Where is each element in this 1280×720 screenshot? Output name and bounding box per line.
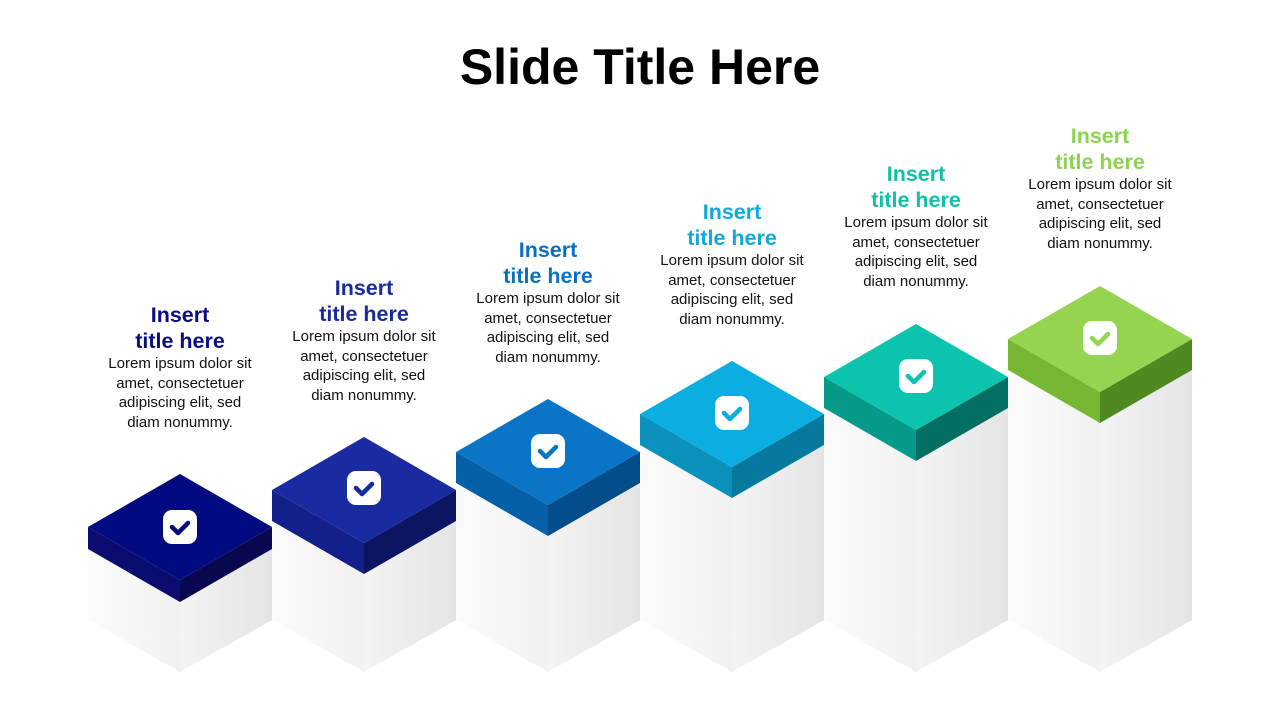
text 1: diam nonummy. bbox=[127, 414, 233, 430]
text 1: Lorem ipsum dolor sit bbox=[108, 355, 252, 372]
text 4: Lorem ipsum dolor sit bbox=[660, 252, 804, 269]
text 5: diam nonummy. bbox=[863, 272, 969, 290]
text 5: Insert bbox=[887, 162, 945, 186]
text 3: Lorem ipsum dolor sit bbox=[476, 290, 620, 307]
text 6: adipiscing elit, sed bbox=[1039, 215, 1161, 232]
block 4 bbox=[640, 361, 824, 672]
text 6 bbox=[1028, 124, 1172, 252]
text 1: title here bbox=[135, 329, 225, 353]
text 3: adipiscing elit, sed bbox=[487, 329, 609, 346]
text 3: Insert bbox=[519, 238, 577, 262]
block 6 bbox=[1008, 286, 1192, 672]
text 3: diam nonummy. bbox=[495, 348, 601, 366]
block 5 bbox=[824, 324, 1008, 672]
text 5: title here bbox=[871, 188, 961, 212]
text 2: Insert bbox=[335, 276, 393, 300]
block 3 bbox=[456, 399, 640, 672]
text 4: adipiscing elit, sed bbox=[671, 291, 793, 308]
title: Slide Title Here bbox=[460, 39, 820, 95]
text 1: Insert bbox=[151, 303, 209, 327]
text 5: amet, consectetuer bbox=[852, 234, 980, 250]
text 3 bbox=[476, 238, 620, 366]
text 2 bbox=[292, 276, 436, 404]
text 1: adipiscing elit, sed bbox=[119, 394, 241, 411]
text 2: adipiscing elit, sed bbox=[303, 367, 425, 384]
text 2: amet, consectetuer bbox=[300, 348, 428, 364]
text 3: amet, consectetuer bbox=[484, 310, 612, 326]
text 2: title here bbox=[319, 302, 409, 326]
text 6: Insert bbox=[1071, 124, 1129, 148]
text 6: amet, consectetuer bbox=[1036, 196, 1164, 212]
text 2: diam nonummy. bbox=[311, 386, 417, 404]
text 1: amet, consectetuer bbox=[116, 374, 244, 392]
text 6: diam nonummy. bbox=[1047, 234, 1153, 252]
block 1 bbox=[88, 474, 272, 672]
block 2 bbox=[272, 437, 456, 672]
text 5 bbox=[844, 162, 988, 290]
text 5: adipiscing elit, sed bbox=[855, 253, 977, 270]
text 4: title here bbox=[687, 226, 777, 250]
text 4: Insert bbox=[703, 200, 761, 224]
text 4 bbox=[660, 200, 804, 328]
text 2: Lorem ipsum dolor sit bbox=[292, 328, 436, 345]
text 3: title here bbox=[503, 264, 593, 288]
text 1 bbox=[108, 303, 252, 430]
text 4: diam nonummy. bbox=[679, 310, 785, 328]
text 6: title here bbox=[1055, 150, 1145, 174]
text 6: Lorem ipsum dolor sit bbox=[1028, 176, 1172, 193]
text 4: amet, consectetuer bbox=[668, 272, 796, 288]
text 5: Lorem ipsum dolor sit bbox=[844, 214, 988, 231]
